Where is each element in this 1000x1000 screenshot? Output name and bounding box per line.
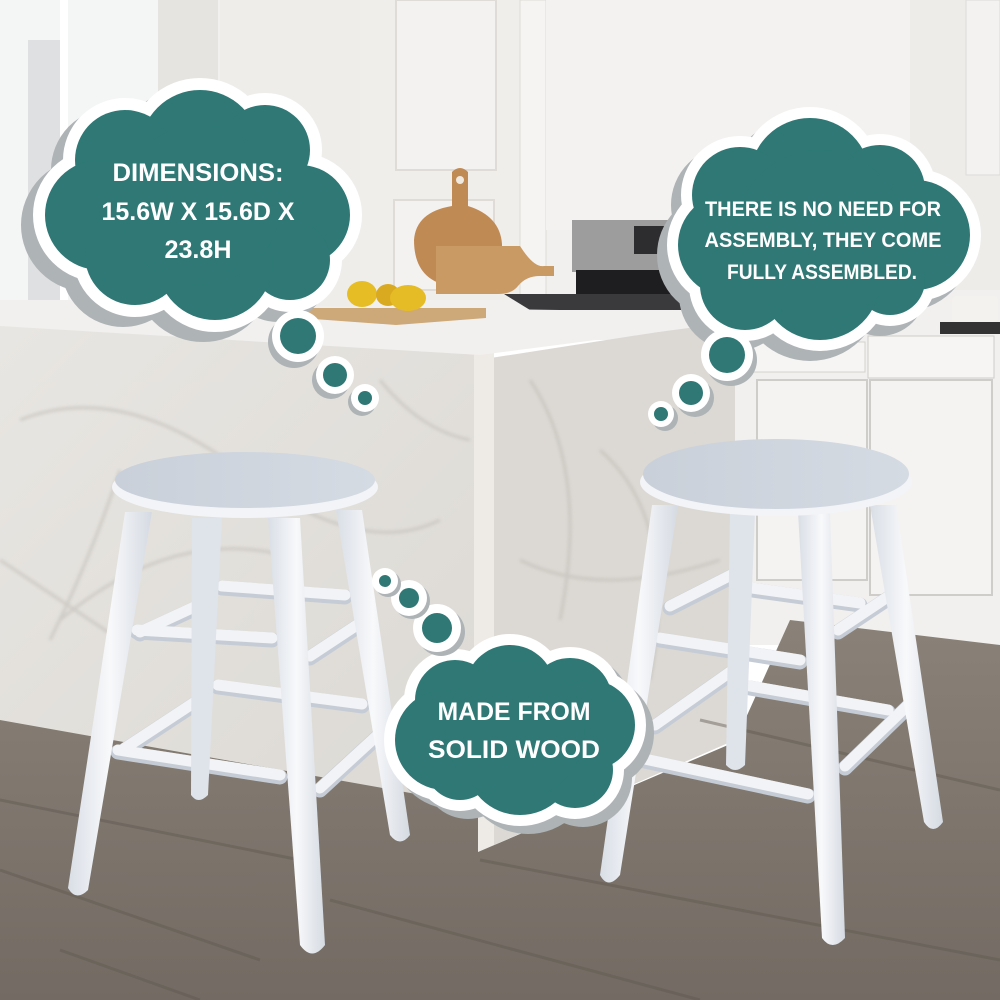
lemons on board — [300, 281, 486, 325]
stool: left — [68, 452, 410, 954]
caption: ASSEMBLY, THEY COME — [704, 229, 942, 252]
caption: DIMENSIONS: — [112, 159, 284, 187]
caption: FULLY ASSEMBLED. — [727, 261, 917, 284]
caption — [704, 198, 942, 284]
trail dots — [648, 329, 757, 431]
trail dots — [372, 568, 465, 656]
stool seat left — [112, 456, 378, 518]
thought bubble: assembly — [648, 118, 970, 431]
stove — [504, 220, 684, 310]
cutting boards — [414, 168, 554, 294]
thought bubble: material — [372, 568, 643, 823]
background: kitchen wall — [0, 0, 1000, 340]
caption — [102, 159, 295, 264]
caption: 23.8H — [164, 236, 232, 264]
stool: right — [600, 439, 943, 945]
caption: SOLID WOOD — [428, 736, 600, 764]
stool seat right — [640, 448, 912, 516]
trail dots — [268, 310, 379, 416]
floor — [0, 620, 1000, 1000]
right cabinets — [735, 296, 1000, 645]
caption: MADE FROM — [438, 698, 590, 726]
thought bubble: dimensions — [33, 90, 379, 416]
kitchen island — [0, 306, 735, 852]
caption: 15.6W X 15.6D X — [102, 198, 295, 226]
caption — [428, 698, 600, 764]
caption: THERE IS NO NEED FOR — [705, 198, 941, 221]
